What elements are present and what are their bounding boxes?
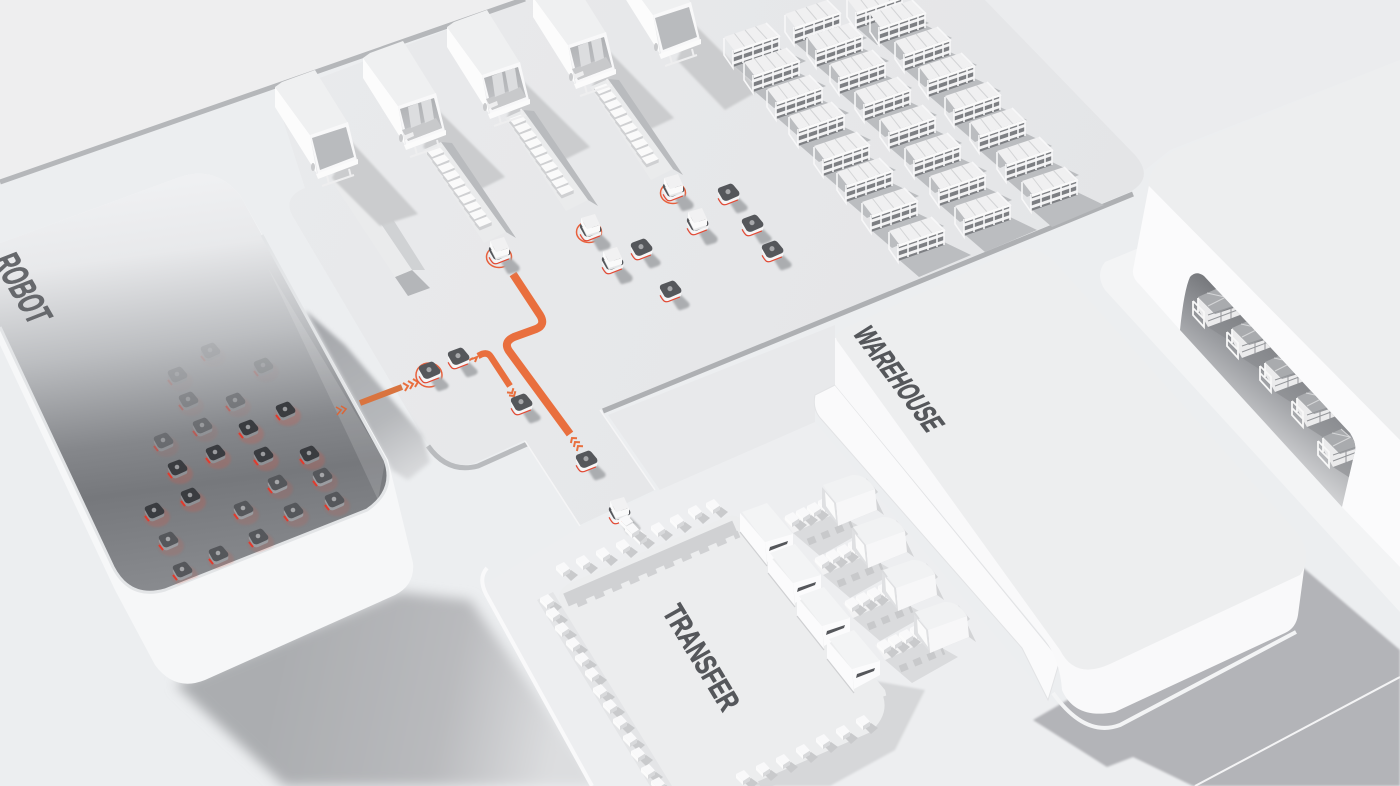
transfer inner edge shadow — [566, 527, 735, 600]
warehouse side ledge — [814, 385, 1060, 700]
warehouse base rim — [1053, 632, 1296, 728]
panel: right building — [1132, 186, 1400, 567]
plate left edge highlight — [482, 568, 592, 786]
truck 5 — [618, 0, 701, 66]
orange route: exit from robot building — [360, 387, 402, 403]
dock shadow on plate — [750, 680, 925, 786]
lower right white edge line — [1195, 677, 1400, 786]
interior wall light wedge — [292, 317, 384, 498]
robot entering transfer — [609, 497, 647, 542]
truck 4 — [533, 0, 616, 96]
glass rim — [0, 235, 388, 592]
orange route: main path — [507, 274, 570, 434]
top box line — [556, 499, 728, 581]
route chevrons — [403, 266, 583, 451]
panel: robot building — [0, 234, 413, 684]
upper left yard — [0, 0, 525, 183]
floor edge shadow — [603, 194, 1133, 411]
panel: warehouse — [814, 249, 1306, 728]
right building roof — [1148, 60, 1400, 440]
bottom box line — [736, 715, 878, 786]
conveyor 2 — [423, 142, 516, 243]
yard edge stripe — [0, 0, 525, 182]
locating rings — [416, 182, 686, 387]
warehouse walls — [835, 300, 1306, 714]
robot building ground shadow — [175, 592, 600, 786]
truck 3 — [447, 10, 530, 126]
corridor edges — [525, 410, 655, 526]
right building wall — [1133, 180, 1400, 567]
warehouse roof — [836, 249, 1306, 670]
top right ground — [985, 0, 1400, 170]
tunnel racks — [1192, 289, 1356, 477]
conveyor 1 strip and shadow — [332, 175, 430, 296]
orange route: short branch — [478, 353, 510, 386]
conveyor 4 — [590, 79, 683, 180]
platform bottom edge shadow — [428, 444, 527, 468]
panel: transfer station — [537, 475, 976, 786]
faded chevrons inside building — [336, 406, 346, 415]
dock conveyors — [783, 497, 958, 683]
warehouse ground shadow — [1033, 565, 1400, 786]
dock houses — [822, 475, 976, 653]
label: WAREHOUSE: WAREHOUSE — [846, 323, 951, 436]
transfer bottom shadow — [760, 695, 890, 786]
main dock floor — [275, 0, 1144, 525]
sunken yard between floor and warehouse — [608, 325, 835, 505]
truck shadows — [332, 22, 760, 226]
transfer surrounding plate — [483, 422, 1190, 786]
robot building shadow on floor — [305, 310, 430, 480]
tunnel opening — [1180, 273, 1355, 507]
conveyor 3 — [505, 110, 598, 211]
robot building outer walls — [0, 174, 413, 684]
label: TRANSFER: TRANSFER — [656, 599, 746, 717]
dark robot fleet — [144, 343, 350, 586]
rack array — [724, 0, 1104, 277]
robot building glass roof — [0, 174, 388, 592]
transfer dock blocks — [740, 503, 880, 693]
left box line — [537, 592, 673, 786]
transfer sunken floor — [559, 516, 887, 786]
truck 1 — [275, 70, 358, 186]
floor robots — [419, 174, 792, 480]
truck 2 — [363, 41, 446, 157]
transfer crenellated shadow — [577, 534, 739, 604]
right building base step — [1100, 140, 1400, 612]
